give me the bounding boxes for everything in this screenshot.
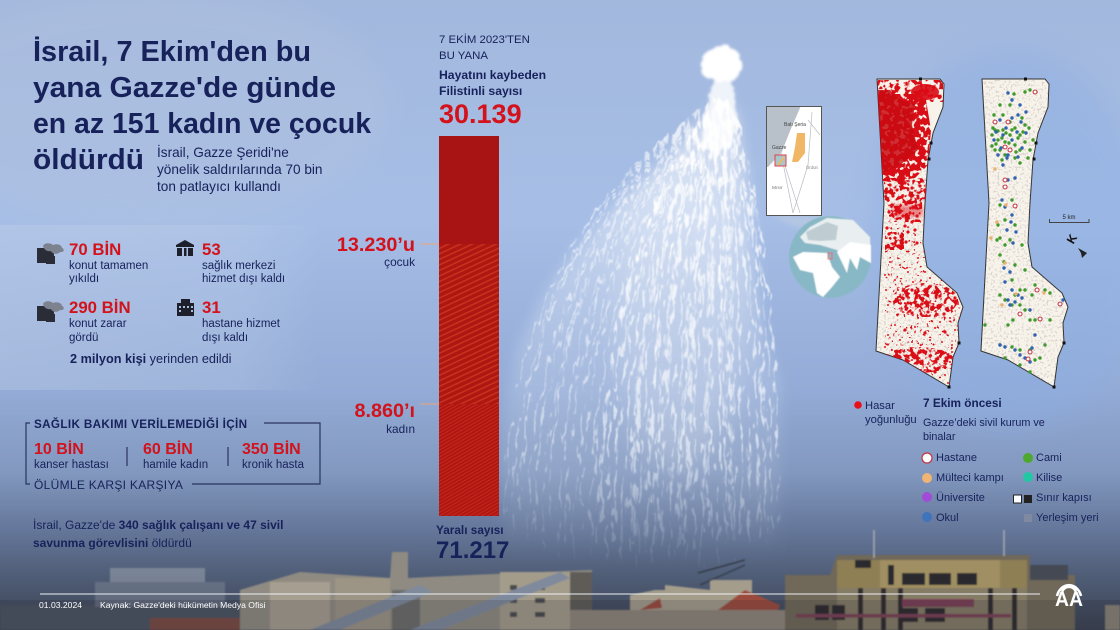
wounded count <box>436 523 509 564</box>
label: children: çocuk <box>384 255 415 269</box>
legend: institutions: binalar <box>923 431 956 443</box>
health workers text <box>33 518 283 550</box>
legend: damage density: yoğunluğu <box>865 414 917 426</box>
stat: chronic patients: kronik hasta <box>242 459 305 471</box>
bar chart: deaths <box>420 136 499 516</box>
stat: cancer patients: kanser hastası <box>34 459 109 471</box>
label: children: 13.230’u <box>337 234 415 256</box>
title <box>33 36 371 176</box>
map: civil institutions <box>980 78 1070 390</box>
title: öldürdü <box>33 144 144 176</box>
globe <box>789 216 871 298</box>
stat: 290 BİN homes <box>69 298 131 344</box>
scale bar <box>1050 215 1089 222</box>
north arrow <box>1064 231 1087 258</box>
death toll heading <box>439 33 546 129</box>
death toll heading: BU YANA <box>439 50 488 62</box>
panel: destruction stats <box>37 240 285 366</box>
label: women <box>354 400 415 436</box>
icon: damaged homes <box>37 301 64 322</box>
stat: cancer patients <box>34 440 109 471</box>
legend: institutions <box>922 396 1099 524</box>
wounded count: 71.217 <box>436 537 509 564</box>
stat: cancer patients: 10 BİN <box>34 440 84 458</box>
locator inset map: Batı Şeria <box>784 122 806 128</box>
subtitle: yönelik saldırılarında 70 bin <box>157 162 322 177</box>
legend: institutions: Mülteci kampı <box>936 472 1004 484</box>
legend: damage density <box>854 400 917 426</box>
stat: pregnant women: hamile kadın <box>143 459 208 471</box>
label: children <box>337 234 415 269</box>
icon: hospital <box>177 299 194 316</box>
wounded count: Yaralı sayısı <box>436 523 504 537</box>
locator inset map: Mısır <box>772 185 783 191</box>
subtitle: İsrail, Gazze Şeridi'ne <box>157 145 289 160</box>
stat: 53 health centres: 53 <box>202 240 221 259</box>
health workers text: savunma görevlisini öldürdü <box>33 536 192 550</box>
locator inset map: Gazze <box>772 145 787 151</box>
locator inset map: Ürdün <box>806 165 819 170</box>
death toll heading: Hayatını kaybeden <box>439 68 546 82</box>
icon: health centre <box>176 240 194 256</box>
label: women: 8.860’ı <box>354 400 415 422</box>
stat: 70 BİN homes <box>69 240 148 285</box>
subtitle <box>157 145 322 194</box>
label: women: kadın <box>386 422 415 436</box>
legend: institutions: Okul <box>936 512 959 524</box>
footer <box>39 594 1040 610</box>
locator inset map <box>766 106 862 228</box>
death toll heading: 7 EKİM 2023'TEN <box>439 33 530 46</box>
smoke plume <box>503 46 780 570</box>
legend: institutions: 7 Ekim öncesi <box>923 396 1002 410</box>
stat: 70 BİN homes: yıkıldı <box>69 273 99 285</box>
footer: 01.03.2024 <box>39 600 82 610</box>
death toll heading: Filistinli sayısı <box>439 84 522 98</box>
subtitle: ton patlayıcı kullandı <box>157 179 281 194</box>
stat: 31 hospitals: dışı kaldı <box>202 332 248 344</box>
city skyline photo <box>0 530 1120 630</box>
legend: institutions: Cami <box>1036 452 1062 464</box>
legend: institutions: Kilise <box>1036 472 1062 484</box>
stat: chronic patients: 350 BİN <box>242 440 301 458</box>
title: İsrail, 7 Ekim'den bu <box>33 36 311 68</box>
stat: 290 BİN homes: konut zarar <box>69 318 127 330</box>
stat: chronic patients <box>242 440 305 471</box>
stat: pregnant women: 60 BİN <box>143 440 193 458</box>
stat: 31 hospitals: 31 <box>202 298 221 317</box>
stat: 70 BİN homes: 70 BİN <box>69 240 121 259</box>
panel: lack of healthcare: SAĞLIK BAKIMI VERİLEMEDİĞİ İÇİN <box>34 418 247 431</box>
stat: pregnant women <box>143 440 208 471</box>
legend: institutions: Üniversite <box>936 492 985 504</box>
scale bar: 5 km <box>1062 215 1076 221</box>
icon: destroyed homes <box>37 243 64 264</box>
footer: Kaynak: Gazze'deki hükümetin Medya Ofisi <box>100 600 266 610</box>
stat: 53 health centres: sağlık merkezi <box>202 260 276 272</box>
legend: institutions: Yerleşim yeri <box>1036 512 1099 524</box>
logo: AA: AA <box>1055 589 1083 611</box>
title: yana Gazze'de günde <box>33 72 336 104</box>
death toll heading: 30.139 <box>439 99 522 129</box>
legend: institutions: Sınır kapısı <box>1036 492 1092 504</box>
displaced people: 2 milyon kişi yerinden edildi <box>70 352 232 366</box>
legend: damage density: Hasar <box>865 400 895 412</box>
stat: 290 BİN homes: 290 BİN <box>69 298 131 317</box>
legend: institutions: Hastane <box>936 452 977 464</box>
north arrow: K <box>1064 231 1080 246</box>
title: en az 151 kadın ve çocuk <box>33 108 371 140</box>
stat: 290 BİN homes: gördü <box>69 332 98 344</box>
panel: lack of healthcare <box>26 418 320 492</box>
panel: lack of healthcare: ÖLÜMLE KARŞI KARŞIYA <box>34 478 183 492</box>
stat: 31 hospitals <box>202 298 281 344</box>
map: damage density <box>875 78 965 390</box>
health workers text: İsrail, Gazze'de 340 sağlık çalışanı ve 47 sivil <box>33 518 283 532</box>
legend: institutions: Gazze’deki sivil kurum ve <box>923 417 1045 429</box>
stat: 70 BİN homes: konut tamamen <box>69 260 148 272</box>
stat: 53 health centres: hizmet dışı kaldı <box>202 273 285 285</box>
stat: 53 health centres <box>202 240 285 285</box>
stat: 31 hospitals: hastane hizmet <box>202 318 281 330</box>
